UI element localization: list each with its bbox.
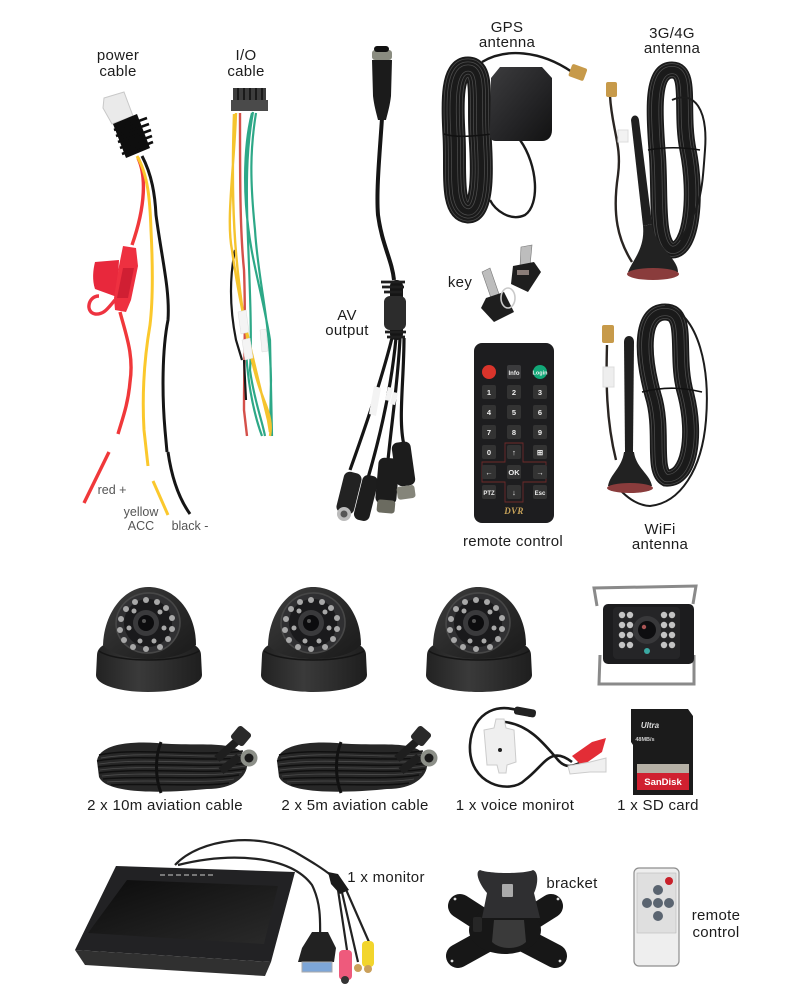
heading: GPS antenna: antenna	[479, 34, 536, 51]
navigation keys: OK	[508, 468, 520, 477]
label: 2 x 10m aviation cable: 2 x 10m aviation cable	[87, 797, 243, 814]
3G/4G antenna	[606, 70, 705, 280]
remote control (DVR)	[474, 343, 554, 523]
label: red +: red +	[98, 483, 126, 497]
navigation keys: Esc	[535, 491, 546, 497]
heading: 3G/4G antenna: 3G/4G	[649, 25, 695, 42]
number keys: 9	[538, 428, 542, 437]
coil	[648, 70, 705, 250]
WiFi antenna	[602, 305, 707, 506]
label: remote control: remote control	[463, 533, 563, 550]
label: yellow ACC: ACC	[128, 519, 154, 533]
module	[484, 719, 516, 773]
lens	[633, 616, 661, 644]
coil	[453, 68, 481, 212]
navigation keys: ↓	[512, 488, 516, 497]
connector	[231, 88, 268, 108]
label: 2 x 5m aviation cable: 2 x 5m aviation cable	[281, 797, 429, 814]
aviation cable 10m	[97, 725, 258, 793]
top connector	[372, 46, 392, 120]
dome camera 1	[96, 587, 202, 692]
login button: Login	[533, 370, 548, 376]
truck camera	[594, 586, 696, 684]
number keys	[482, 385, 547, 459]
SMA plug	[606, 82, 617, 97]
heading: WiFi antenna: antenna	[632, 536, 689, 553]
heading: I/O cable: I/O	[236, 47, 256, 64]
login button	[533, 365, 548, 379]
key two	[511, 245, 541, 292]
icon: keys	[481, 245, 541, 322]
green wires	[245, 112, 272, 436]
white connector	[103, 92, 133, 124]
number keys: 0	[487, 448, 491, 457]
knob	[473, 917, 482, 932]
voice monitor	[470, 706, 606, 787]
RCA connectors	[339, 941, 374, 984]
wire tags	[238, 310, 268, 360]
navigation keys: ↑	[512, 448, 516, 457]
SD card: SanDisk	[644, 777, 682, 788]
camera body	[603, 604, 694, 664]
red wire	[84, 158, 143, 503]
monitor	[75, 840, 369, 976]
heading: power cable: cable	[99, 63, 137, 80]
key ring	[501, 288, 515, 308]
direction keys	[642, 885, 674, 921]
navigation keys: ⊞	[537, 448, 544, 457]
clip	[502, 884, 513, 897]
magnetic base	[628, 224, 678, 272]
button strip	[160, 874, 215, 876]
heading: GPS antenna: GPS	[491, 19, 523, 36]
red wire	[240, 113, 247, 436]
VGA connector	[298, 932, 336, 972]
SD card: Ultra	[641, 721, 660, 730]
lead cables	[482, 53, 572, 217]
label: remote control (IR): control	[692, 924, 740, 941]
remote body	[474, 343, 554, 523]
info button: Info	[508, 371, 520, 377]
label: 1 x monitor: 1 x monitor	[347, 869, 425, 886]
black wire	[142, 156, 190, 514]
number keys: 2	[512, 388, 516, 397]
fuse holder	[89, 246, 138, 314]
navigation keys: →	[536, 468, 544, 477]
label: bracket: bracket	[546, 875, 598, 892]
key one	[481, 268, 514, 322]
heading: AV output: output	[325, 322, 369, 339]
base plate	[451, 898, 561, 962]
black wire	[231, 250, 246, 400]
aviation cable 5m	[277, 725, 438, 793]
IR remote control	[634, 868, 679, 966]
remote body	[634, 868, 679, 966]
info button	[507, 365, 521, 379]
bracket	[451, 870, 561, 962]
SD card	[631, 709, 693, 795]
SD card: 48MB/s	[635, 737, 655, 743]
label: key: key	[448, 274, 472, 291]
black boot	[113, 114, 153, 158]
power cable	[84, 92, 190, 515]
number keys: 1	[487, 388, 491, 397]
main cable	[377, 118, 394, 280]
label: black -: black -	[172, 519, 208, 533]
heading: I/O cable: cable	[227, 63, 265, 80]
ferrite	[381, 280, 406, 340]
coil	[620, 305, 707, 506]
bracket	[594, 586, 696, 684]
hinge	[492, 920, 526, 948]
label: 1 x SD card: 1 x SD card	[617, 797, 699, 814]
SMA plug	[602, 325, 614, 343]
magnetic base	[608, 452, 652, 486]
navigation keys	[482, 443, 547, 502]
number keys: 5	[512, 408, 516, 417]
navigation keys: PTZ	[483, 491, 495, 497]
label: yellow ACC: yellow	[124, 505, 158, 519]
GPS antenna	[444, 53, 588, 217]
whip	[624, 336, 634, 452]
label: remote control (IR): remote	[692, 907, 740, 924]
yellow wires	[230, 113, 271, 436]
whip	[631, 116, 652, 226]
label: 1 x voice monirot: 1 x voice monirot	[456, 797, 575, 814]
indicator	[644, 648, 650, 654]
heading: power cable: power	[97, 47, 139, 64]
power button	[482, 365, 496, 379]
DVR logo: DVR	[503, 506, 524, 516]
heading: WiFi antenna: WiFi	[644, 521, 676, 538]
inner panel	[613, 607, 680, 659]
navigation keys: ←	[485, 468, 493, 477]
number keys: 8	[512, 428, 516, 437]
cable tag	[618, 130, 628, 142]
number keys: 4	[487, 408, 492, 417]
lead cable	[610, 96, 632, 262]
key panel	[637, 873, 676, 933]
mic barrel	[513, 706, 537, 718]
cable	[470, 708, 585, 787]
red plug	[572, 738, 606, 766]
SMA plug	[568, 64, 588, 81]
heading: 3G/4G antenna: antenna	[644, 40, 701, 57]
connector ends	[335, 441, 416, 522]
dome camera 3	[426, 587, 532, 692]
cable tags	[369, 386, 398, 416]
heading: AV output: AV	[337, 307, 357, 324]
cable tag	[603, 367, 614, 387]
number keys: 3	[538, 388, 542, 397]
splitter	[328, 872, 349, 894]
coil tie	[444, 134, 492, 136]
dome camera 2	[261, 587, 367, 692]
white plug	[568, 758, 606, 774]
lead cable	[607, 345, 616, 460]
LED panels	[619, 612, 675, 648]
red power key	[665, 877, 673, 885]
yellow wire	[137, 156, 168, 515]
mic hole	[498, 748, 502, 752]
number keys: 7	[487, 428, 491, 437]
number keys: 6	[538, 408, 542, 417]
signal cables	[175, 840, 369, 962]
AV output cable	[335, 46, 416, 522]
I/O cable	[230, 88, 272, 436]
receiver puck	[490, 67, 552, 141]
screen	[88, 880, 278, 944]
carbon plate	[478, 870, 540, 918]
base	[75, 950, 271, 976]
bezel	[75, 866, 295, 962]
branches	[350, 338, 404, 478]
